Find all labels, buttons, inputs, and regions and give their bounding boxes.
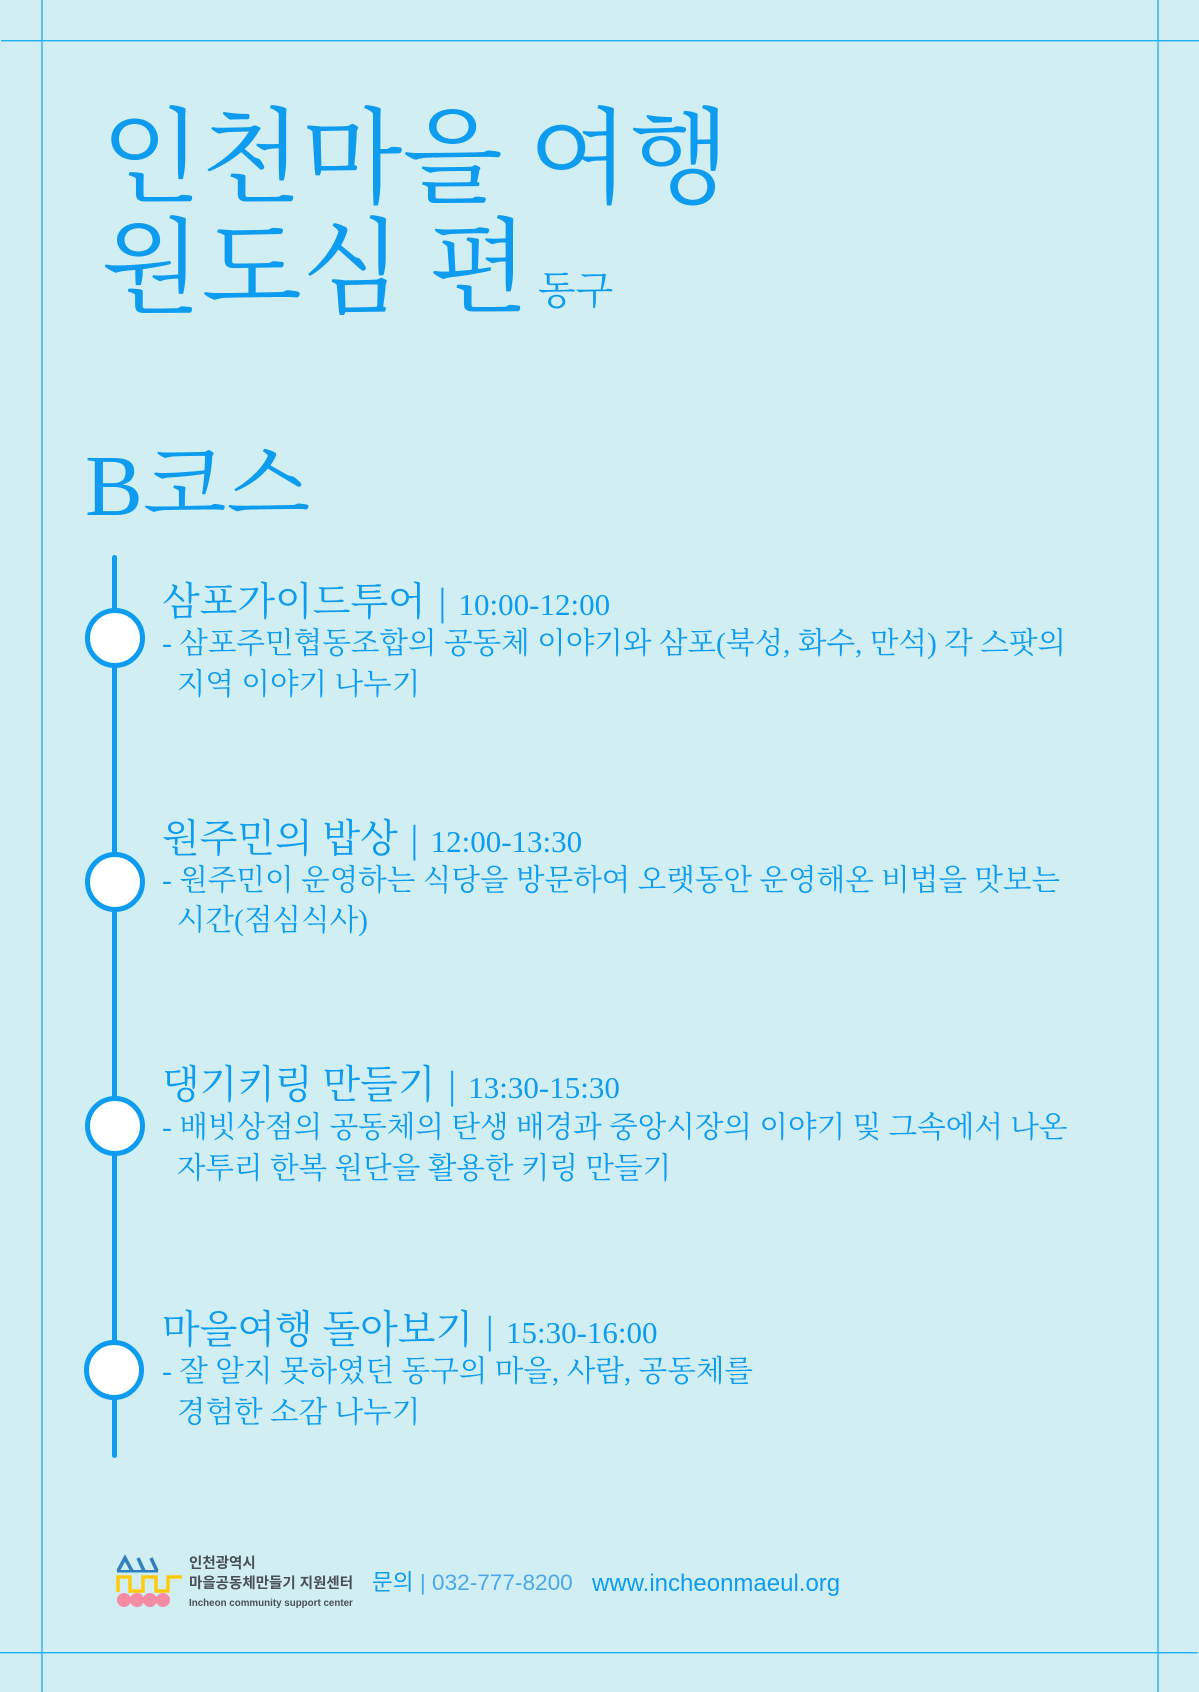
stop 3	[162, 1064, 1067, 1185]
title: 인천마을 여행	[101, 102, 730, 217]
stop 2 description	[162, 864, 1060, 937]
organisation name: 마을공동체만들기 지원센터	[189, 1576, 353, 1592]
stop 2 heading: 원주민의 밥상 | 12:00-13:30	[162, 818, 582, 861]
timeline marker 4	[84, 1340, 144, 1400]
timeline marker 3	[85, 1096, 145, 1156]
stop 4 description	[162, 1356, 753, 1429]
timeline marker 2	[85, 852, 145, 912]
stop 1 description: 지역 이야기 나누기	[177, 669, 420, 701]
stop 2	[162, 818, 1060, 937]
stop 1 description	[162, 628, 1066, 701]
website: www.incheonmaeul.org	[592, 1570, 840, 1597]
contact label and phone: 문의 | 032-777-8200	[372, 1570, 573, 1595]
organisation name	[189, 1555, 353, 1609]
stop 3 description: 자투리 한복 원단을 활용한 키링 만들기	[177, 1153, 671, 1185]
course heading: B코스	[85, 438, 310, 534]
title: 원도심 편동구	[101, 212, 613, 327]
timeline rail	[112, 555, 117, 1458]
stop 1 heading: 삼포가이드투어 | 10:00-12:00	[162, 581, 610, 624]
stop 1 description: - 삼포주민협동조합의 공동체 이야기와 삼포(북성, 화수, 만석) 각 스팟의	[162, 628, 1066, 660]
title	[101, 102, 730, 327]
organisation name: 인천광역시	[189, 1556, 256, 1572]
stop 4	[162, 1309, 753, 1429]
stop 3 description: - 배빗상점의 공동체의 탄생 배경과 중앙시장의 이야기 및 그속에서 나온	[162, 1112, 1067, 1144]
stop 3 description	[162, 1112, 1067, 1185]
timeline marker 1	[85, 608, 145, 668]
stop 1	[162, 581, 1066, 701]
stop 4 description: 경험한 소감 나누기	[177, 1397, 420, 1429]
stop 3 heading: 댕기키링 만들기 | 13:30-15:30	[162, 1064, 620, 1107]
stop 2 description: 시간(점심식사)	[177, 905, 368, 937]
stop 2 description: - 원주민이 운영하는 식당을 방문하여 오랫동안 운영해온 비법을 맛보는	[162, 865, 1060, 897]
organisation name: Incheon community support center	[189, 1598, 353, 1609]
stop 4 heading: 마을여행 돌아보기 | 15:30-16:00	[162, 1309, 658, 1352]
stop 4 description: - 잘 알지 못하였던 동구의 마을, 사람, 공동체를	[162, 1356, 753, 1388]
